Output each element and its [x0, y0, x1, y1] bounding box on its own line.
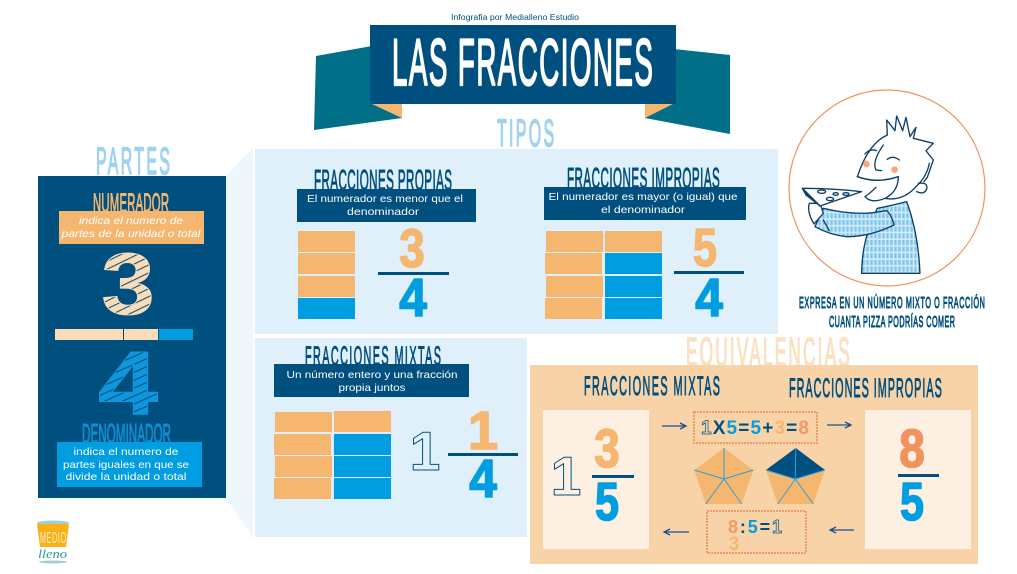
- title: LAS FRACCIONES: [392, 25, 653, 99]
- fraction 3/4: 4: [399, 267, 427, 327]
- pizza slice: [802, 188, 862, 206]
- definition: el denominador: [601, 204, 686, 216]
- title banner: [314, 25, 730, 134]
- panel: equivalencias: [530, 365, 978, 564]
- column heading: mixtas: FRACCIONES MIXTAS: [584, 371, 720, 402]
- definition: Un número entero y una fracción: [286, 369, 458, 381]
- definition: denominador: [347, 206, 420, 218]
- sweater: [862, 202, 920, 273]
- arrow bottom left: [664, 529, 689, 535]
- pentagon: three fifths shaded: [766, 448, 825, 504]
- definition: [297, 189, 476, 222]
- fraction 5/4: 4: [695, 267, 723, 327]
- mixed number card: 5: [595, 473, 619, 532]
- arrow top left: [662, 423, 686, 429]
- mixed number 1 1/4: 4: [469, 448, 497, 508]
- arrow top right: [827, 422, 851, 428]
- fraction 3/4: 3: [399, 219, 425, 279]
- illustration: boy eating pizza: [789, 90, 985, 286]
- denominador description: partes iguales en que se: [63, 459, 189, 471]
- pentagon: five fifths: [694, 448, 753, 504]
- bar blocks: [545, 231, 662, 319]
- arm sleeve: [815, 208, 894, 237]
- caption: EXPRESA EN UN NÚMERO MIXTO O FRACCIÓN: [799, 293, 985, 312]
- fracciones impropias: [544, 162, 746, 327]
- numerador description: [59, 211, 204, 244]
- logo: MEDIO: [40, 529, 66, 547]
- hand: [809, 203, 823, 224]
- nose: [875, 145, 883, 171]
- panel: partes: [38, 176, 226, 498]
- definition: propia juntos: [338, 382, 406, 394]
- mixed number card: 3: [594, 419, 620, 479]
- heading: partes: PARTES: [96, 141, 170, 183]
- improper fraction card: 8: [899, 419, 925, 479]
- denominador description: indica el numero de: [74, 446, 179, 458]
- denominador description: divide la unidad o total: [66, 471, 186, 483]
- numerador description: partes de la unidad o total: [60, 228, 201, 240]
- cheeks: [863, 161, 870, 167]
- hair: [887, 116, 933, 182]
- mixed number card: 1: [551, 445, 581, 507]
- heading: tipos: TIPOS: [497, 113, 554, 155]
- denominador description: [57, 442, 202, 487]
- heading: FRACCIONES IMPROPIAS: [567, 162, 720, 195]
- fraction bar: [55, 329, 193, 340]
- fraction 5/4: [674, 219, 744, 327]
- mixed number card: [543, 410, 649, 549]
- multiplication formula box: 1X5=5+3=8: [701, 418, 809, 439]
- division formula box: [707, 511, 806, 555]
- numerador description: indica el numero de: [79, 215, 183, 227]
- column heading: impropias: FRACCIONES IMPROPIAS: [789, 373, 942, 404]
- fracciones propias: [297, 164, 476, 327]
- arrow bottom right: [830, 527, 854, 533]
- fraction 3/4: [378, 219, 449, 327]
- bar blocks: [298, 231, 355, 319]
- definition: [274, 364, 469, 397]
- division formula box: 8:5=1: [728, 517, 782, 537]
- logo: [37, 520, 69, 564]
- eyes: [865, 150, 899, 160]
- ear: [917, 183, 927, 193]
- bar blocks: [274, 411, 391, 499]
- definition: El numerador es menor que el: [307, 193, 463, 205]
- improper fraction card: [865, 410, 971, 549]
- fraction 5/4: 5: [693, 219, 717, 278]
- definition: El numerador es mayor (o igual) que: [548, 191, 738, 203]
- division formula box: 3: [729, 534, 739, 555]
- denominador heading: DENOMINADOR: [82, 418, 171, 450]
- left ribbon: [314, 46, 402, 130]
- panel: tipos: [255, 149, 778, 334]
- connector shape between partes and tipos: [226, 148, 253, 538]
- definition: [544, 187, 746, 220]
- mixed number 1 1/4: [410, 401, 518, 508]
- left ribbon fold: [372, 104, 402, 118]
- numerador heading: NUMERADOR: [93, 189, 169, 219]
- big denominator 4: 4: [98, 333, 158, 434]
- head: [857, 135, 929, 201]
- mixed number 1 1/4: 1: [410, 420, 440, 482]
- heading: FRACCIONES PROPIAS: [314, 164, 452, 197]
- caption: [799, 293, 985, 331]
- right ribbon: [645, 49, 730, 134]
- circle frame: [789, 90, 985, 286]
- caption: CUANTA PIZZA PODRÍAS COMER: [829, 312, 955, 331]
- panel: fracciones mixtas: [255, 338, 527, 537]
- credit line: Infografia por Medialleno Estudio: [451, 13, 580, 22]
- mixed number 1 1/4: 1: [468, 401, 498, 461]
- big numerator 3: 3: [101, 236, 155, 333]
- right ribbon fold: [645, 104, 673, 118]
- heading: FRACCIONES MIXTAS: [305, 341, 441, 372]
- logo: lleno: [38, 546, 68, 561]
- title box: [370, 25, 676, 104]
- heading: equivalencias: EQUIVALENCIAS: [686, 329, 850, 375]
- multiplication formula box: [694, 412, 817, 443]
- improper fraction card: 5: [900, 473, 924, 532]
